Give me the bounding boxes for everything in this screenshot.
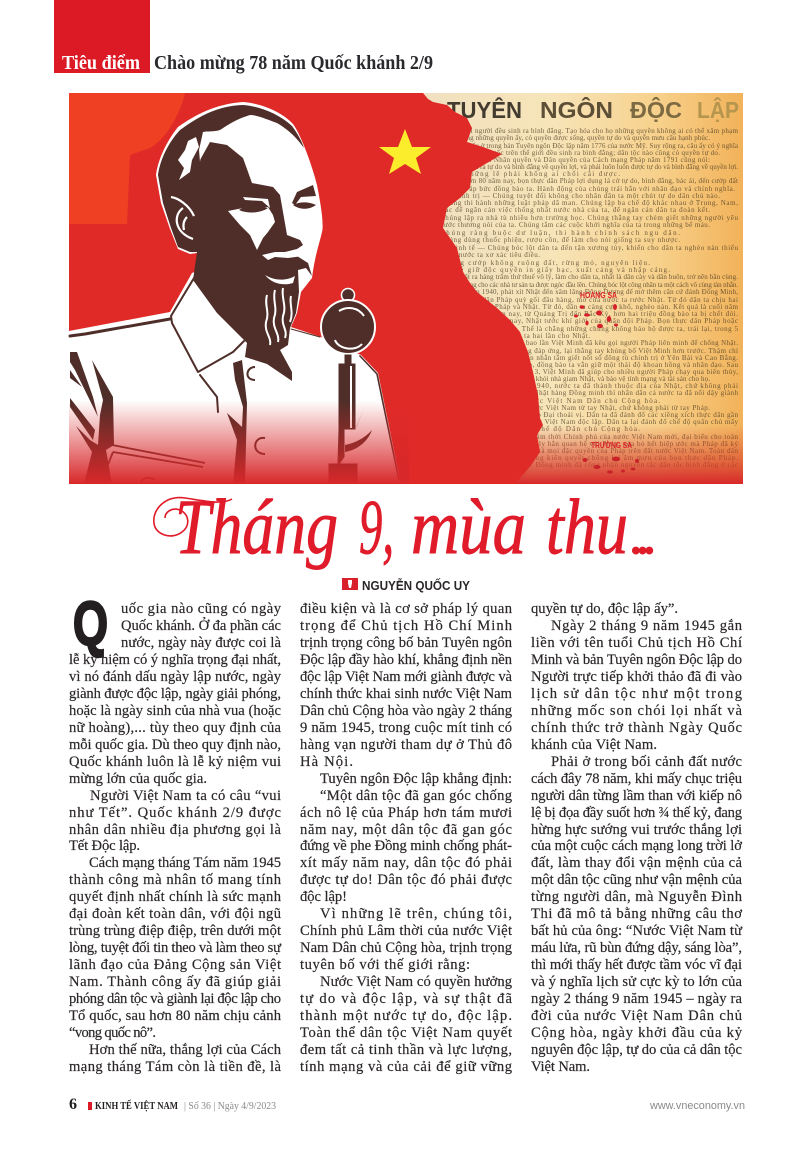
microphone stem <box>328 354 358 484</box>
article column 2: ách nô lệ của Pháp hơn tám mươi <box>300 805 512 821</box>
article column 2: xít mấy năm nay, dân tộc đó phải <box>300 855 512 871</box>
hair highlights <box>178 137 199 180</box>
article column 2: đem tất cả tinh thần và lực lượng, <box>300 1042 512 1058</box>
newspaper body text: Tuy vậy, đối với người Pháp, đồng bào ta vẫn giữ một thái độ khoan hồng và nhân đạo. Sau <box>440 361 738 369</box>
article column 3: từng người dân, mà Nguyễn Đình <box>531 889 743 905</box>
collar and shoulder lines <box>70 278 399 480</box>
newspaper body text: Chúng dùng thuốc phiện, rượu cồn, để làm cho nòi giống ta suy nhược. <box>440 236 680 244</box>
hero illustration <box>69 93 743 484</box>
article column 1: phóng dân tộc và giành lại độc lập cho <box>69 991 281 1007</box>
article column 2: Tuyên ngôn Độc lập khẳng định: <box>320 771 512 787</box>
article column 3: đời của nước Việt Nam Dân chủ <box>531 1008 743 1024</box>
article column 2: chính thức khai sinh nước Việt Nam <box>300 686 513 702</box>
article column 1: quyết định nhất chính là sức mạnh <box>69 889 282 905</box>
article column 2: tự do và độc lập, và sự thật đã <box>300 991 513 1007</box>
article column 3: thì mới thấy hết được tầm vóc vĩ đại <box>531 957 742 973</box>
article column 3: Cộng hòa, ngày khởi đầu của kỷ <box>531 1025 743 1041</box>
newspaper body text: Chúng không cho các nhà tư sản ta được ngóc đầu lên. Chúng bóc lột công nhân ta một cách vô cùng tàn nhẫn. <box>440 281 738 289</box>
newspaper body text: Bọn thực dân Pháp đã không đáp ứng, lại thẳng tay khủng bố Việt Minh hơn trước. Thậm chí <box>440 347 738 355</box>
article column 1: mừng lớn của quốc gia. <box>69 771 207 787</box>
island group label: Trường Sa <box>582 441 639 474</box>
article column 1: hoặc là ngày sinh của nhà vua (hoặc <box>69 703 282 719</box>
article column 1: “vong quốc nô”. <box>69 1025 156 1041</box>
article column 3: lịch sử dân tộc như một trong <box>531 686 743 702</box>
newspaper body text: Bắc để ngăn cản việc thống nhất nước nhà của ta, để ngăn cản dân ta đoàn kết. <box>440 206 710 214</box>
article column 3: máu lửa, rũ bùn đứng dậy, sáng lòa”, <box>531 940 742 956</box>
article column 2: độc lập! <box>300 889 347 905</box>
newspaper body text: 100 năm để gây dựng nên nước Việt Nam độc lập. Dân ta lại đánh đổ chế độ quân chủ mấy <box>440 418 738 426</box>
beard strands <box>266 288 292 345</box>
newspaper body text: Chúng cướp không ruộng đất, rừng mỏ, nguyên liệu. <box>440 259 650 267</box>
publication name: KINH TẾ VIỆT NAM <box>95 1099 178 1112</box>
red marker <box>88 1102 92 1110</box>
article column 2: điều kiện và là cơ sở pháp lý quan <box>300 601 513 617</box>
article column 1: trùng trùng điệp điệp, trên dưới một <box>69 923 281 939</box>
article column 3: Minh và bản Tuyên ngôn Độc lập do <box>531 652 742 668</box>
article column 2: Dân chủ Cộng hòa vào ngày 2 tháng <box>300 703 513 719</box>
newspaper body text: được; trong những quyền ấy, có quyền được sống, quyền tự do và quyền mưu cầu hạnh phúc. <box>440 134 710 142</box>
newspaper body text: cuộc biến động ngày 9 tháng 3, Việt Minh đã giúp cho nhiều người Pháp chạy qua biên thùy, <box>440 368 738 376</box>
newspaper body text: về nước Việt Nam, xóa bỏ tất cả mọi đặc quyền của Pháp trên đất nước Việt Nam. Toàn dân <box>440 447 738 455</box>
article column 2: “Một dân tộc đã gan góc chống <box>320 788 513 804</box>
page footer <box>69 1096 745 1113</box>
newspaper body text: Tất cả mọi người đều sinh ra bình đẳng. Tạo hóa cho họ những quyền không ai có thể xâm phạm <box>440 127 739 135</box>
section heading: Chào mừng 78 năm Quốc khánh 2/9 <box>154 52 433 74</box>
title swash on T <box>154 498 232 536</box>
newspaper body text: thuộc địa của Pháp nữa. Khi Nhật hàng Đồng minh thì nhân dân cả nước ta đã nổi dậy giành <box>440 389 738 397</box>
newspaper body text: Chúng giữ độc quyền in giấy bạc, xuất cảng và nhập cảng. <box>440 266 670 274</box>
left brow highlight <box>243 197 270 208</box>
newspaper body text: lại cứu cho nhiều người Pháp ra khỏi nhà giam Nhật, và bảo vệ tính mạng và tài sản cho họ. <box>440 375 710 383</box>
section tag: Tiêu điểm <box>54 0 150 74</box>
red map of Vietnam <box>69 93 543 484</box>
newspaper body text: Người ta sinh ra tự do và bình đẳng về quyền lợi, và phải luôn luôn được tự do và bình đẳng về quyền lợi. <box>440 163 738 171</box>
article column 1: lễ kỷ niệm có ý nghĩa trọng đại nhất, <box>69 652 281 668</box>
moustache highlight <box>262 252 303 284</box>
article column 2: Chính phủ Lâm thời của nước Việt <box>300 923 512 939</box>
newspaper body text: mươi thế kỷ mà lập nên chế độ Dân chủ Cộng hòa. <box>440 425 640 433</box>
island group label: Hoàng Sa: HOÀNG SA <box>580 291 617 300</box>
article column 3: Thi đã mô tả bằng những câu thơ <box>531 906 742 922</box>
buttons <box>247 367 265 454</box>
article column 1: nữ hoàng),... tùy theo quy định của <box>69 720 282 736</box>
newspaper body text: Bản Tuyên ngôn Nhân quyền và Dân quyền của Cách mạng Pháp năm 1791 cũng nói: <box>440 156 710 164</box>
newspaper body text: Sự thật là từ mùa thu năm 1940, nước ta đã thành thuộc địa của Nhật, chứ không phải <box>440 382 738 390</box>
newspaper body text: Chúng ràng buộc dư luận, thi hành chính sách ngu dân. <box>440 229 680 237</box>
article column 3: nguyên độc lập, tự do của cả dân tộc <box>531 1042 743 1058</box>
article column 1: Nam. Thành công ấy đã giúp giải <box>69 974 281 990</box>
hair and face shadow <box>158 105 312 381</box>
sleeve folds <box>70 352 114 484</box>
newspaper body text: nước thương nòi của ta. Chúng tắm các cuộc khởi nghĩa của ta trong những bể máu. <box>440 221 710 229</box>
article column 1: Người Việt Nam ta có câu “vui <box>90 788 281 804</box>
flag star <box>379 129 431 174</box>
article column 3: bất hủ của ông: “Nước Việt Nam từ <box>531 923 743 939</box>
chest pocket <box>105 445 205 484</box>
article column 3: đất, làm thay đổi vận mệnh của cả <box>531 855 743 871</box>
portrait of President Ho Chi Minh <box>69 102 401 484</box>
article column 3: quyền tự do, độc lập ấy”. <box>531 601 678 617</box>
article column 3: Ngày 2 tháng 9 năm 1945 gắn <box>551 618 743 634</box>
main title: Tháng <box>175 483 338 570</box>
newspaper body text: ngoái sang đầu năm nay, từ Quảng Trị đến Bắc Kỳ, hơn hai triệu đồng bào ta bị chết đói. <box>440 310 738 318</box>
newspaper body text: dân Việt Nam, tuyên bố thoát ly hẳn quan hệ với Pháp, xóa bỏ hết hiệp ước mà Pháp đã ký <box>440 440 738 448</box>
article column 2: tuyên bố với thế giới rằng: <box>300 957 470 973</box>
newspaper body text: đến khi thua chạy, chúng còn nhẫn tâm giết nốt số đông tù chính trị ở Yên Bái và Cao Bằng. <box>440 354 738 362</box>
newspaper body text: bỏ chạy, hoặc đầu hàng. Thế là chẳng những chúng không bảo hộ được ta, trái lại, trong 5 <box>440 325 738 333</box>
article column 3: và ý nghĩa lịch sử cực kỳ to lớn của <box>531 974 743 990</box>
article column 3: khánh của Việt Nam. <box>531 737 657 753</box>
article column 3: lệ bị đọa đầy suốt hơn ¾ thế kỷ, đang <box>531 805 743 821</box>
fade over newspaper <box>500 425 743 484</box>
newspaper body text: Trước ngày 9 tháng 3, biết bao lần Việt Minh đã kêu gọi người Pháp liên minh để chống Nhật. <box>440 339 738 347</box>
website: www.vneconomy.vn <box>649 1100 745 1112</box>
byline: NGUYỄN QUỐC UY <box>362 578 470 593</box>
newspaper body text: Thế mà hơn 80 năm nay, bọn thực dân Pháp lợi dụng lá cờ tự do, bình đẳng, bác ái, đến cướp đất <box>440 177 738 185</box>
article column 2: Nam Dân chủ Cộng hòa, trịnh trọng <box>300 940 513 956</box>
article column 1: nước, ngày này được coi là <box>121 635 282 651</box>
article column 2: Vì những lẽ trên, chúng tôi, <box>320 906 512 922</box>
newspaper body text: Về kinh tế — Chúng bóc lột dân ta đến tận xương tủy, khiến cho dân ta nghèo nàn thiếu <box>440 244 738 252</box>
newspaper body text: Chúng tôi tin rằng các nước Đồng minh đã công nhận nguyên tắc dân tộc bình đẳng ở các <box>440 461 738 469</box>
article column 3: chính thức trở thành Ngày Quốc <box>531 720 743 736</box>
newspaper body text: năm, chúng đã bán nước ta hai lần cho Nhật. <box>440 332 590 340</box>
cheek and nose highlight <box>228 207 275 250</box>
article column 2: năm nay, một dân tộc đã gan góc <box>300 822 513 838</box>
newspaper body text: Chúng đặt ra hàng trăm thứ thuế vô lý, làm cho dân ta, nhất là dân cày và dân buôn, trở nên bần cùng. <box>440 273 738 281</box>
article column 3: Người trực tiếp khởi thảo đã đi vào <box>531 669 742 685</box>
article column 2: 9 năm 1945, trong cuộc mít tinh có <box>300 720 512 736</box>
article column 1: vì nó đánh dấu ngày lập nước, ngày <box>69 669 282 685</box>
page number: 6 <box>69 1096 77 1113</box>
article column 1: thành công mà nhân tố mang tính <box>69 872 282 888</box>
article column 2: độc lập Việt Nam mới giành được và <box>300 669 513 685</box>
section tag: Tiêu điểm: Tiêu điểm <box>62 52 140 74</box>
article column 1: Tổ quốc, sau hơn 80 năm chịu cảnh <box>69 1008 282 1024</box>
newspaper heading: NGÔN <box>540 96 613 123</box>
newspaper body text: nước ta, áp bức đồng bào ta. Hành động của chúng trái hẳn với nhân đạo và chính nghĩa. <box>440 185 735 193</box>
article column 1: mạng tháng Tám còn là tiền đề, là <box>69 1059 282 1075</box>
article column 1: nhân dân nhiều địa phương gọi là <box>69 822 282 838</box>
newspaper body text: Lời bất hủ ấy ở trong bản Tuyên ngôn Độc lập năm 1776 của nước Mỹ. Suy rộng ra, câu ấy có ý nghĩa <box>440 142 739 150</box>
newspaper body text: là: tất cả các dân tộc trên thế giới đều sinh ra bình đẳng; dân tộc nào cũng có quyền tự do. <box>440 149 720 157</box>
article column 2: Nước Việt Nam có quyền hưởng <box>320 974 513 990</box>
article column 3 <box>531 601 743 1075</box>
newspaper body text: Mùa thu năm 1940, phát xít Nhật đến xâm lăng Đông Dương để mở thêm căn cứ đánh Đồng Minh, <box>440 288 738 296</box>
article column 3: những mốc son chói lọi nhất và <box>531 703 743 719</box>
main title: mùa <box>411 483 526 570</box>
article column 2: tính mạng và của cải để giữ vững <box>300 1059 513 1075</box>
right brow and eye <box>292 185 316 209</box>
issue and date: | Số 36 | Ngày 4/9/2023 <box>184 1100 276 1112</box>
article column 2: Hà Nội. <box>300 754 353 770</box>
article column 2: trịnh trọng công bố bản Tuyên ngôn <box>300 635 513 651</box>
article column 3: cách đây 78 năm, khi mấy chục triệu <box>531 771 743 787</box>
article column 3: Việt Nam. <box>531 1059 590 1075</box>
main title <box>154 483 658 570</box>
main title: thu <box>546 483 628 570</box>
article column 1: Quốc khánh. Ở đa phần các <box>121 617 282 634</box>
article column 2: trọng để Chủ tịch Hồ Chí Minh <box>300 618 513 634</box>
newspaper background <box>400 93 743 484</box>
newspaper body text: Đó là những lẽ phải không ai chối cãi được. <box>440 170 620 178</box>
newspaper body text: Ngày 9 tháng 3 năm nay, Nhật tước khí giới của quân đội Pháp. Bọn thực dân Pháp hoặc <box>440 317 738 325</box>
article column 2: được tự do! Dân tộc đó phải được <box>300 872 513 888</box>
main title: ... <box>630 501 658 566</box>
newspaper body text: Bởi thế cho nên, chúng tôi, Lâm thời Chính phủ của nước Việt Nam mới, đại biểu cho toàn <box>440 433 738 441</box>
article column 3: hừng hực sướng vui trước thắng lợi <box>531 822 742 838</box>
newspaper body text: Pháp chạy, Nhật hàng, vua Bảo Đại thoái vị. Dân ta đã đánh đổ các xiềng xích thực dân gần <box>440 411 738 419</box>
forehead streak <box>199 132 212 162</box>
article column 1: Tết Độc lập. <box>69 838 140 854</box>
article column 1 <box>69 601 282 1075</box>
newspaper body text <box>440 127 739 469</box>
article column 3: của một cuộc cách mạng long trời lở <box>531 838 742 854</box>
article column 2: Độc lập đầy hào khí, khẳng định nền <box>300 652 513 668</box>
article column 1: lãnh đạo của Đảng Cộng sản Việt <box>69 957 281 973</box>
jacket placket <box>227 360 247 484</box>
island group label: Hoàng Sa <box>574 291 618 328</box>
article column 1: mỗi quốc gia. Dù theo quy định nào, <box>69 737 281 753</box>
article column 3: người dân từng lầm than với kiếp nô <box>531 788 742 804</box>
newspaper body text: tầng xiềng xích: Pháp và Nhật. Từ đó, dân ta càng cực khổ, nghèo nàn. Kết quả là cuối năm <box>440 303 739 311</box>
newspaper heading: TUYÊN <box>447 96 522 123</box>
article column 1: giành được độc lập, ngày giải phóng, <box>69 686 281 702</box>
newspaper body text: Sự thật là dân ta đã lấy lại nước Việt Nam từ tay Nhật, chứ không phải từ tay Pháp. <box>440 404 710 412</box>
article column 1: như Tết”. Quốc khánh 2/9 được <box>69 805 282 821</box>
newspaper body text: Chúng lập ra nhà tù nhiều hơn trường học. Chúng thẳng tay chém giết những người yêu <box>440 214 738 222</box>
island group label: Trường Sa: TRƯỜNG SA <box>591 441 632 450</box>
article column 1: Cách mạng tháng Tám năm 1945 <box>89 855 281 871</box>
drop cap Q: Q <box>73 590 108 659</box>
microphone <box>321 288 375 484</box>
article column 3: Phải ở trong bối cảnh đất nước <box>551 754 743 770</box>
article column 1: Hơn thế nữa, thắng lợi của Cách <box>89 1042 282 1058</box>
newspaper body text: Việt Nam trên dưới một lòng kiên quyết chống lại âm mưu của bọn thực dân Pháp. <box>440 454 738 462</box>
article column 1: Quốc khánh luôn là lễ kỷ niệm vui <box>69 754 281 770</box>
pen icon <box>342 578 358 590</box>
lighter red block <box>69 93 185 224</box>
article column 2: đứng về phe Đồng minh chống phát- <box>300 838 512 854</box>
newspaper body text: chính quyền, lập nên nước Việt Nam Dân chủ Cộng hòa. <box>440 397 660 405</box>
article column 3: liền với tên tuổi Chủ tịch Hồ Chí <box>531 635 742 651</box>
main title: 9, <box>359 483 394 570</box>
article column 1: lòng, tuyệt đối tin theo và làm theo sự <box>69 940 282 956</box>
newspaper body text: Chúng thi hành những luật pháp dã man. Chúng lập ba chế độ khác nhau ở Trung, Nam, <box>440 199 738 207</box>
newspaper body text: thì bọn thực dân Pháp quỳ gối đầu hàng, mở cửa nước ta rước Nhật. Từ đó dân ta chịu hai <box>440 296 738 304</box>
article column 2: hàng vạn người tham dự ở Thủ đô <box>300 737 512 753</box>
white silhouette <box>69 102 401 484</box>
newspaper heading <box>447 96 739 123</box>
newspaper heading: ĐỘC <box>630 96 682 123</box>
article column 2 <box>300 601 513 1075</box>
article column 2: Toàn thể dân tộc Việt Nam quyết <box>300 1025 512 1041</box>
article column 1: uốc gia nào cũng có ngày <box>121 601 282 617</box>
newspaper heading: LẬP <box>697 96 739 123</box>
newspaper body text: Về chính trị — Chúng tuyệt đối không cho nhân dân ta một chút tự do dân chủ nào. <box>440 192 720 200</box>
ear <box>171 197 194 239</box>
left eye <box>239 206 268 212</box>
article column 3: một dân tộc cũng như vận mệnh của <box>531 872 743 888</box>
newspaper body text: thốn, nước ta xơ xác tiêu điều. <box>440 251 540 259</box>
article column 1: đại đoàn kết toàn dân, với đội ngũ <box>69 906 282 922</box>
bottom fade over portrait <box>69 400 409 484</box>
article column 2: thành một nước tự do, độc lập. <box>300 1008 512 1024</box>
article column 3: ngày 2 tháng 9 năm 1945 – ngày ra <box>531 991 743 1007</box>
